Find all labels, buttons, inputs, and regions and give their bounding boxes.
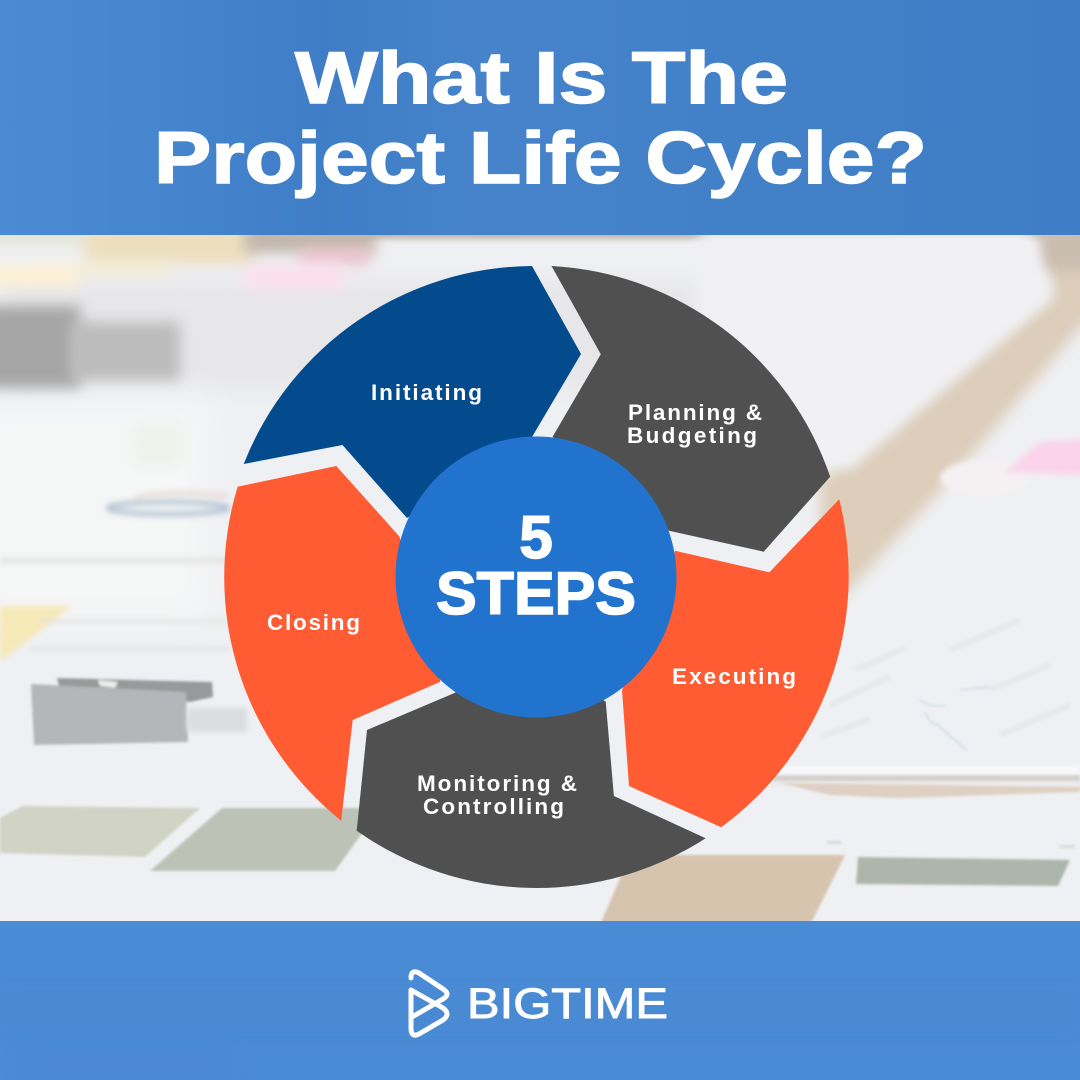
- title: Project Life Cycle?: [154, 118, 927, 199]
- binder clip: [31, 678, 213, 745]
- bottom logo band: [0, 921, 1080, 1080]
- right side tan desk and paper: [820, 225, 1080, 600]
- center circle: 5 steps: [396, 436, 676, 718]
- segment: Planning & Budgeting: Planning &: [628, 400, 762, 425]
- segment: Executing: [622, 499, 849, 827]
- segment: Monitoring & Controlling: Controlling: [423, 794, 564, 819]
- title: [154, 38, 927, 199]
- segment: Monitoring & Controlling: [357, 650, 706, 888]
- center circle: 5 steps: 5: [519, 504, 553, 571]
- segment: Initiating: [244, 266, 581, 518]
- logo icon: [411, 972, 447, 1035]
- segment: Closing: Closing: [267, 610, 360, 635]
- segment: Initiating: Initiating: [371, 380, 482, 405]
- segment: Planning & Budgeting: [552, 266, 830, 552]
- yellow note: [0, 606, 72, 662]
- top title band: [0, 0, 1080, 235]
- logo wordmark: BIGTIME: [467, 980, 668, 1028]
- segment: Executing: Executing: [672, 664, 796, 689]
- segment: Monitoring & Controlling: Monitoring &: [417, 771, 577, 796]
- segment: Closing: [224, 466, 440, 821]
- blurred photo background: [0, 215, 1080, 925]
- cycle diagram: [224, 266, 849, 888]
- segment: Planning & Budgeting: Budgeting: [627, 423, 757, 448]
- title: What Is The: [295, 38, 788, 119]
- tan and grey swatches: [600, 855, 845, 925]
- colour swatches: [0, 806, 200, 857]
- center circle: 5 steps: STEPS: [436, 560, 636, 627]
